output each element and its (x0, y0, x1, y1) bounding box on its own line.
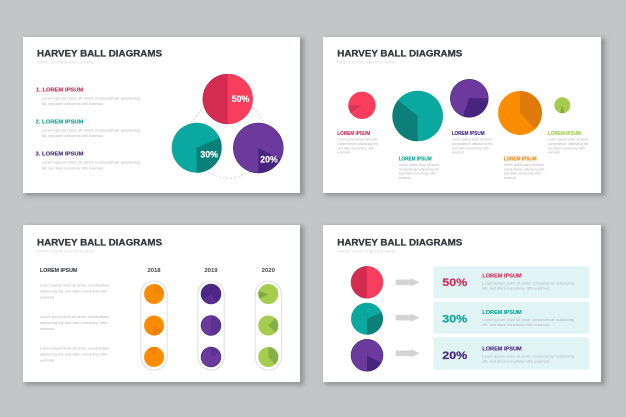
red label (337, 131, 378, 155)
row 20% (433, 337, 589, 370)
red label: Lorem ipsum dolor sit amet, (337, 138, 378, 142)
list item 2: 2. LOREM IPSUM (36, 120, 84, 126)
row text 2: adipiscing elit, sed diam nonummy nibh (40, 321, 107, 325)
teal label: Lorem ipsum dolor sit amet, (399, 163, 440, 167)
green label: Lorem ipsum dolor sit amet, (548, 138, 589, 142)
orange label: Lorem ipsum dolor sit amet, (504, 163, 545, 167)
teal ball (392, 91, 443, 141)
dashed connectors (192, 108, 264, 178)
orange ball (498, 91, 542, 135)
year headings: 2020 (262, 268, 275, 274)
title: HARVEY BALL DIAGRAMS (37, 237, 163, 248)
panel: yearly comparison table (23, 225, 304, 385)
red ball (348, 92, 376, 119)
row 20%: elit, sed diam nonummy nibh euismod. (482, 359, 550, 363)
arrow 2 (396, 314, 420, 322)
orange label: LOREM IPSUM (504, 156, 537, 162)
green label: sed diam nonummy nibh (548, 146, 585, 150)
orange label (504, 156, 545, 180)
list item 3: 3. LOREM IPSUM (36, 152, 84, 158)
row 30% (433, 302, 589, 334)
row 30%: Lorem ipsum dolor sit amet, consectetuer adipiscing (482, 318, 574, 322)
panel: three linked harvey balls (23, 37, 304, 196)
subtitle: WRITE YOUR SUBTITLE HERE (337, 60, 396, 64)
panel: percentage rows (323, 225, 605, 385)
column 2020 (255, 281, 281, 370)
purple label: sed diam nonummy nibh (452, 146, 489, 150)
row text 1: adipiscing elit, sed diam nonummy nibh (40, 290, 107, 294)
list item 1 (36, 88, 140, 106)
ball 30% (351, 303, 383, 335)
row 20%: LOREM IPSUM (482, 346, 522, 352)
subtitle: WRITE YOUR SUBTITLE HERE (37, 60, 96, 64)
row text 1: euismod. (40, 296, 55, 300)
orange label: sed diam nonummy nibh (504, 172, 541, 176)
row text 3: adipiscing elit, sed diam nonummy nibh (40, 352, 107, 356)
harvey ball: 20%: 20% (260, 154, 278, 164)
ball 50% (351, 266, 383, 298)
red label: LOREM IPSUM (337, 131, 371, 137)
list item 1: Lorem ipsum dolor sit amet, consectetuer adipiscing (42, 96, 140, 100)
arrow 1 (396, 278, 420, 286)
purple label: LOREM IPSUM (452, 131, 485, 137)
subtitle: WRITE YOUR SUBTITLE HERE (37, 250, 96, 254)
row text 2 (40, 315, 110, 331)
list item 2: elit, sed diam nonummy nibh euismod. (42, 134, 104, 138)
green label (548, 131, 589, 155)
teal label: sed diam nonummy nibh (399, 172, 436, 176)
row text 3: Lorem ipsum dolor sit amet, consectetuer (40, 346, 110, 350)
list item 2: Lorem ipsum dolor sit amet, consectetuer adipiscing (42, 128, 140, 132)
orange label: euismod. (504, 176, 517, 180)
row 30%: 30% (442, 313, 468, 325)
harvey ball: 50% (203, 74, 253, 124)
title: HARVEY BALL DIAGRAMS (337, 237, 463, 248)
purple ball (450, 79, 488, 117)
row 50%: LOREM IPSUM (482, 274, 522, 280)
purple label: Lorem ipsum dolor sit amet, (452, 138, 493, 142)
list item 3 (36, 152, 140, 170)
list item 1: elit, sed diam nonummy nibh euismod. (42, 102, 104, 106)
teal label: consectetuer adipiscing elit, (399, 167, 440, 171)
year headings: 2019 (204, 268, 218, 274)
year headings: 2018 (147, 268, 161, 274)
teal label (399, 156, 440, 180)
harvey ball: 20% (233, 123, 283, 173)
green label: consectetuer adipiscing elit, (548, 142, 589, 146)
year headings (147, 268, 275, 274)
list item 1: 1. LOREM IPSUM (36, 88, 84, 94)
row text 2: euismod. (40, 327, 55, 331)
green ball (554, 97, 570, 113)
subtitle: WRITE YOUR SUBTITLE HERE (337, 250, 396, 254)
row 20%: 20% (442, 350, 468, 362)
row 30%: elit, sed diam nonummy nibh euismod. (482, 323, 550, 327)
list item 3: elit, sed diam nonummy nibh euismod. (42, 166, 104, 170)
harvey ball: 30%: 30% (200, 149, 218, 159)
column 2019 (198, 281, 224, 370)
teal label: LOREM IPSUM (399, 156, 432, 162)
column 2018 (141, 281, 167, 370)
row text 3: euismod. (40, 358, 55, 362)
row 50%: 50% (442, 277, 468, 289)
red label: sed diam nonummy nibh (337, 146, 374, 150)
teal label: euismod. (399, 176, 412, 180)
row 50%: elit, sed diam nonummy nibh euismod. (482, 287, 550, 291)
row text 1: Lorem ipsum dolor sit amet, consectetuer (40, 284, 110, 288)
harvey ball: 50%: 50% (232, 94, 249, 104)
green label: euismod. (548, 151, 561, 155)
row 50% (433, 266, 589, 298)
red label: consectetuer adipiscing elit, (337, 142, 378, 146)
row text 2: Lorem ipsum dolor sit amet, consectetuer (40, 315, 110, 319)
panel: five sized harvey balls (323, 37, 605, 196)
row 20%: Lorem ipsum dolor sit amet, consectetuer adipiscing (482, 354, 574, 358)
row text 1 (40, 284, 110, 300)
title: HARVEY BALL DIAGRAMS (37, 49, 163, 60)
row 30%: LOREM IPSUM (482, 310, 522, 316)
purple label: consectetuer adipiscing elit, (452, 142, 493, 146)
arrow 3 (396, 349, 420, 357)
title: HARVEY BALL DIAGRAMS (337, 49, 463, 60)
row 50%: Lorem ipsum dolor sit amet, consectetuer adipiscing (482, 282, 574, 286)
red label: euismod. (337, 151, 350, 155)
ball 20% (351, 339, 383, 371)
purple label: euismod. (452, 151, 465, 155)
orange label: consectetuer adipiscing elit, (504, 167, 545, 171)
green label: LOREM IPSUM (548, 131, 581, 137)
harvey ball: 30% (172, 123, 222, 173)
purple label (452, 131, 493, 155)
row text 3 (40, 346, 110, 362)
column heading: LOREM IPSUM (40, 268, 78, 274)
list item 2 (36, 120, 140, 138)
list item 3: Lorem ipsum dolor sit amet, consectetuer adipiscing (42, 160, 140, 164)
